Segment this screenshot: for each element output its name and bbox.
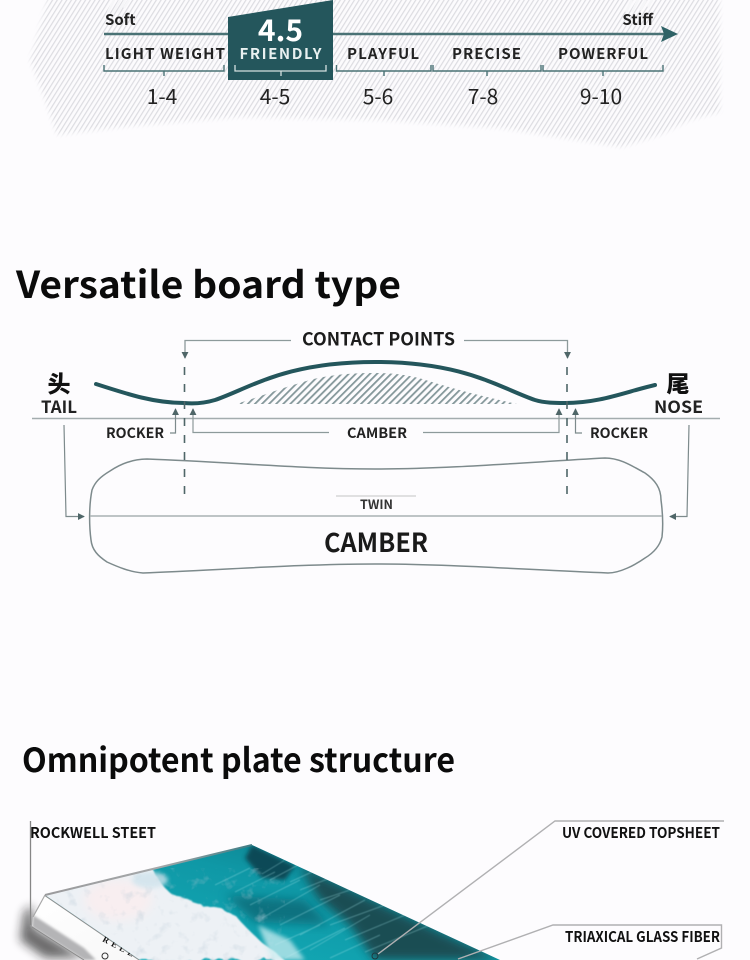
rocker leader left	[170, 409, 176, 433]
flex scale panel	[29, 0, 722, 148]
highlighted rating badge	[228, 0, 333, 80]
nose chinese label: 尾	[666, 365, 690, 399]
contact points label: CONTACT POINTS	[302, 326, 455, 352]
plate structure figure	[20, 821, 724, 960]
wave streaks	[215, 860, 430, 958]
camber small label: CAMBER	[347, 423, 407, 443]
camber diagram	[32, 326, 720, 573]
side logo ring	[102, 953, 108, 959]
category: light weight: LIGHT WEIGHT	[105, 43, 225, 64]
tail chinese label: 头	[48, 365, 70, 399]
heading: omnipotent plate structure: Omnipotent plate structure	[22, 734, 455, 782]
range: 1-4: 1-4	[147, 81, 177, 111]
category: playful: PLAYFUL	[347, 43, 419, 64]
rockwell label: ROCKWELL STEET	[30, 822, 156, 843]
contact dashed line left	[184, 367, 186, 500]
range: 7-8: 7-8	[468, 81, 498, 111]
hatched background	[29, 0, 722, 148]
twin label	[336, 494, 416, 513]
shallow water foam	[258, 925, 305, 960]
twin label: TWIN	[360, 494, 393, 513]
board top edge	[45, 845, 252, 895]
scribble near stiff	[626, 0, 652, 12]
side brand text: RELE	[101, 934, 136, 959]
board drop shadow	[20, 905, 85, 958]
rocker label left: ROCKER	[106, 423, 164, 443]
scribble near soft	[108, 0, 129, 13]
tail leader	[64, 425, 84, 516]
rocker leader right	[576, 409, 582, 433]
category: precise: PRECISE	[452, 43, 521, 64]
category: powerful: POWERFUL	[558, 43, 648, 64]
board outline	[90, 458, 663, 573]
hatched camber area	[236, 373, 517, 404]
topsheet label: UV COVERED TOPSHEET	[562, 822, 720, 843]
range: 9-10: 9-10	[580, 81, 622, 111]
camber profile curve	[96, 362, 655, 403]
rocker label right: ROCKER	[590, 423, 648, 443]
foam texture	[45, 868, 285, 960]
bracket: friendly	[235, 65, 326, 76]
ground line	[32, 418, 720, 420]
nose label: NOSE	[654, 393, 703, 418]
label: stiff: Stiff	[622, 9, 654, 30]
range brackets	[104, 65, 663, 76]
label: soft: Soft	[105, 9, 136, 30]
contact leader left	[185, 340, 291, 358]
heading: versatile board type: Versatile board type	[15, 255, 401, 309]
foam	[40, 864, 285, 960]
range: 4-5: 4-5	[260, 81, 290, 111]
camber leader right	[423, 409, 559, 432]
scale arrow	[104, 26, 678, 42]
camber large label: CAMBER	[324, 523, 428, 560]
topsheet leader	[372, 821, 724, 959]
range: 5-6: 5-6	[363, 81, 393, 111]
board side edge	[32, 895, 140, 960]
nose leader	[670, 425, 689, 516]
camber leader left	[193, 409, 329, 432]
tail label: TAIL	[41, 393, 77, 418]
contact dashed line right	[566, 367, 568, 500]
board centre line	[90, 515, 662, 517]
category: friendly: FRIENDLY	[240, 43, 322, 64]
glass fiber label: TRIAXICAL GLASS FIBER	[565, 926, 720, 947]
deep water shading	[245, 845, 295, 880]
rating value: 4.5	[258, 6, 303, 50]
contact leader right	[464, 340, 568, 358]
rockwell leader	[30, 821, 32, 925]
glass fiber leader	[458, 925, 722, 959]
board topsheet ocean print	[30, 845, 510, 960]
